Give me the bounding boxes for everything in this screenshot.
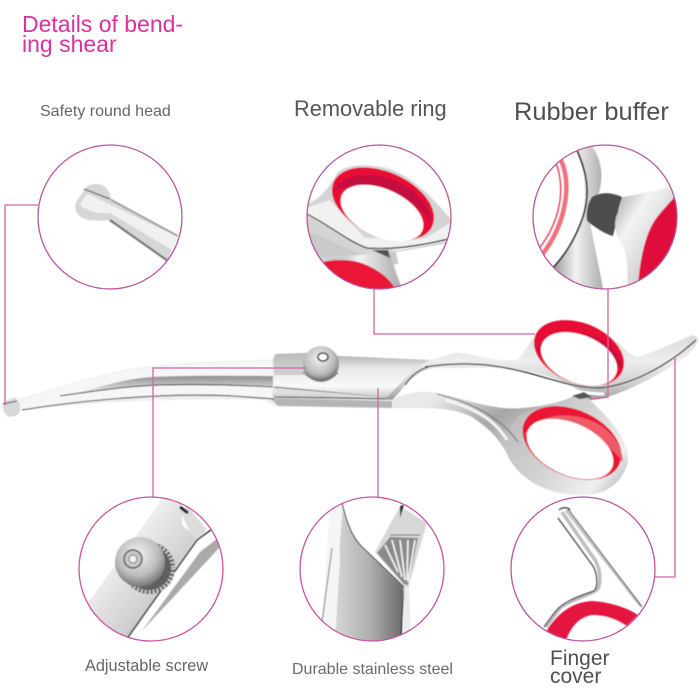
label: safety round head: Safety round head	[40, 103, 171, 120]
icon: blade body	[335, 510, 404, 640]
upper ring opening	[533, 322, 625, 396]
upper blade tip section	[14, 360, 273, 410]
round tip	[3, 398, 20, 417]
panel: safety round head	[38, 145, 182, 289]
label: removable ring: Removable ring	[294, 96, 447, 121]
lower handle ring metal	[506, 393, 628, 495]
panel: rubber buffer	[533, 145, 685, 295]
connector: durable stainless steel	[377, 388, 379, 498]
icon: blade wedge	[375, 506, 427, 588]
connector: adjustable screw	[153, 368, 306, 498]
connector lines	[5, 205, 675, 577]
icon: red strip	[541, 160, 566, 256]
connector: rubber buffer	[590, 289, 608, 399]
lower handle shank	[393, 392, 597, 470]
hinge shadow	[572, 392, 592, 399]
icon: blade edge	[403, 587, 411, 636]
panel: finger cover	[511, 497, 655, 641]
label: finger cover: cover	[550, 665, 601, 688]
icon: lower ring fragment	[298, 258, 345, 295]
connector: removable ring	[374, 289, 535, 334]
icon: red ring arc	[547, 601, 638, 640]
lower ring red	[511, 392, 633, 494]
icon: blade	[88, 499, 196, 637]
panel: durable stainless steel	[300, 495, 444, 645]
upper blade mid section	[273, 353, 470, 399]
upper handle	[385, 323, 698, 400]
icon: upper handle	[308, 164, 450, 282]
upper ring red	[524, 308, 634, 398]
lower ring opening	[517, 407, 623, 491]
icon: red handle	[638, 197, 676, 280]
label: adjustable screw: Adjustable screw	[85, 657, 208, 675]
connector: finger cover	[655, 358, 675, 577]
label: finger cover: Finger	[550, 647, 610, 670]
blade grey wedge	[74, 376, 274, 394]
pivot screw	[303, 346, 339, 382]
panel: removable ring	[298, 145, 455, 295]
icon: left band	[553, 146, 604, 295]
label: durable stainless steel: Durable stainless steel	[292, 661, 453, 678]
scissors main illustration	[3, 308, 698, 495]
icon: round tip	[75, 184, 178, 262]
icon: knurled screw	[129, 543, 176, 594]
lower blade	[20, 395, 393, 411]
title: Details of bend-	[22, 11, 183, 37]
icon: red ring	[331, 166, 435, 241]
icon: finger rest	[566, 510, 641, 606]
icon: right handle	[614, 186, 674, 284]
connector: safety round head	[5, 205, 38, 405]
icon: rubber bumper	[587, 193, 622, 236]
label: rubber buffer: Rubber buffer	[514, 98, 669, 126]
title: ing shear	[22, 31, 117, 57]
panel: adjustable screw	[79, 497, 223, 641]
